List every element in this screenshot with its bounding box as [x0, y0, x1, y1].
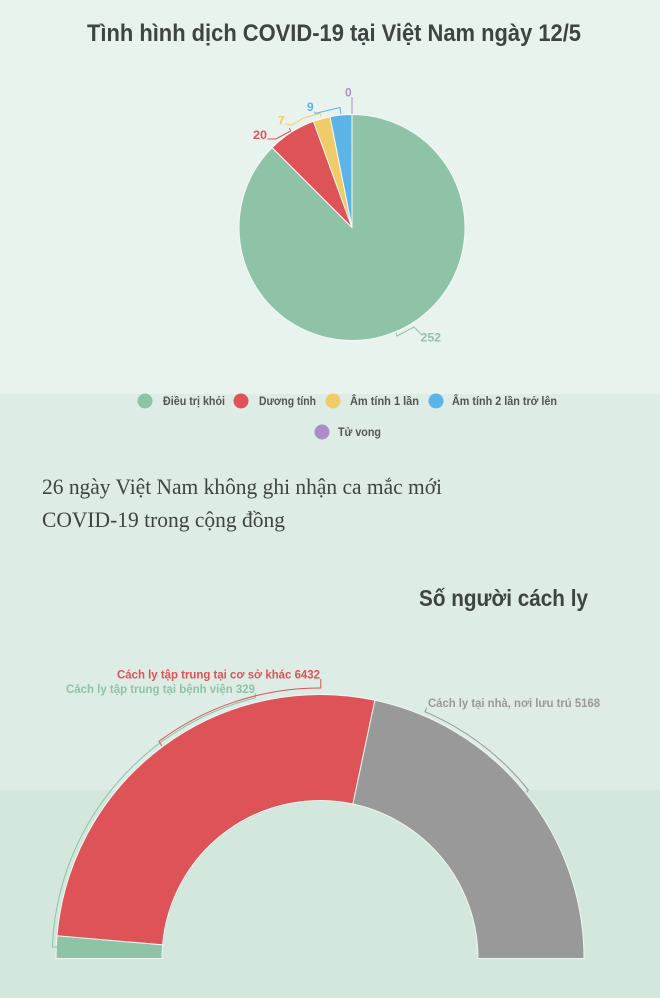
legend item: Âm tính 1 lần: Âm tính 1 lần — [350, 393, 419, 408]
callout: Cách ly tập trung tại cơ sở khác 6432 — [117, 668, 321, 746]
legend — [138, 393, 557, 440]
data label: 7 — [278, 114, 321, 128]
callout: Cách ly tại nhà, nơi lưu trú 5168 — [425, 696, 600, 792]
callout: Cách ly tập trung tại cơ sở khác 6432: Cách ly tập trung tại cơ sở khác 6432 — [117, 668, 320, 682]
data label: 9 — [307, 100, 341, 114]
data label: 20 — [253, 128, 290, 142]
legend item: Âm tính 2 lần trở lên — [428, 393, 557, 408]
slice: Âm tính 1 lần 7 — [313, 117, 352, 228]
legend item: Điều trị khỏi: Điều trị khỏi — [163, 394, 225, 408]
segment: Cách ly tập trung tại bệnh viện 329 — [56, 936, 163, 958]
legend item: Tử vong: Tử vong — [338, 425, 381, 439]
legend item: Dương tính — [234, 394, 316, 408]
slice: Điều trị khỏi 252 — [239, 114, 465, 340]
data label: 7: 7 — [278, 114, 285, 128]
data label: 252: 252 — [420, 330, 441, 344]
pie chart: COVID-19 cases — [239, 86, 465, 344]
slice: Dương tính 20 — [272, 121, 352, 228]
callout: Cách ly tại nhà, nơi lưu trú 5168: Cách ly tại nhà, nơi lưu trú 5168 — [428, 696, 600, 710]
text block: 26 days without new community cases: COVID-19 trong cộng đồng — [42, 507, 285, 532]
callout: Cách ly tập trung tại bệnh viện 329: Cách ly tập trung tại bệnh viện 329 — [66, 682, 255, 696]
data label: 0: 0 — [345, 86, 352, 100]
data label: 0 — [345, 86, 352, 114]
legend item: Tử vong — [314, 424, 381, 440]
half-donut chart: quarantined people — [52, 668, 600, 958]
segment: Cách ly tập trung tại cơ sở khác 6432 — [57, 695, 375, 945]
callout: Cách ly tập trung tại bệnh viện 329 — [52, 682, 255, 947]
data label: 9: 9 — [307, 100, 314, 114]
legend item: Âm tính 1 lần — [326, 393, 419, 408]
text block: 26 days without new community cases: 26 ngày Việt Nam không ghi nhận ca mắc mới — [42, 474, 442, 499]
segment: Cách ly tại nhà, nơi lưu trú 5168 — [353, 700, 584, 958]
legend item: Điều trị khỏi — [138, 394, 225, 408]
data label: 20: 20 — [253, 128, 267, 142]
slice: Âm tính 2 lần trở lên 9 — [330, 114, 352, 228]
heading: Số người cách ly: Số người cách ly — [419, 585, 588, 611]
legend item: Dương tính: Dương tính — [259, 394, 316, 408]
text block: 26 days without new community cases — [42, 474, 442, 532]
title: Tình hình dịch COVID-19 tại Việt Nam ngày 12/5 — [87, 20, 581, 47]
legend item: Âm tính 2 lần trở lên: Âm tính 2 lần trở lên — [452, 393, 557, 408]
data label: 252 — [396, 327, 441, 344]
